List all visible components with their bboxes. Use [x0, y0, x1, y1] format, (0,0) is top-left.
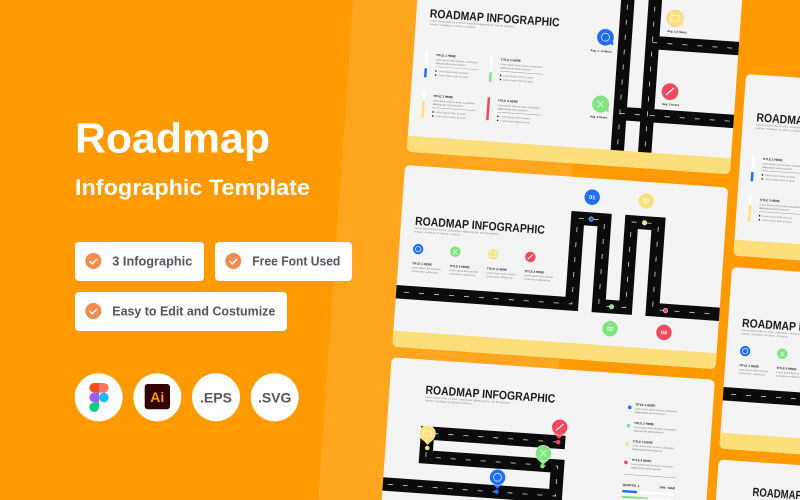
item 4: adipiscing elit, sed do eiusmod [497, 107, 528, 113]
main title: Roadmap [75, 114, 270, 162]
road stop 04: 04 [661, 330, 668, 337]
legend list [624, 402, 678, 472]
column 1: Lorem ipsum dolor sit amet [412, 266, 441, 271]
panel: slide 3, serpentine road with pins: tempor incididunt ut labore et dolore [425, 399, 472, 405]
slide 4 item 1: TITLE 1 HERE [762, 157, 783, 162]
legend list: TITLE 1 HERE [635, 402, 655, 408]
item 4 [486, 97, 541, 125]
road stop 02 [602, 304, 619, 337]
road stop 03: 03 [643, 199, 649, 205]
item 2: Lorem ipsum dolor sit amet, consectetur [500, 63, 543, 69]
slide 4 item 1 [751, 156, 800, 185]
road stop 01: 01 [589, 195, 595, 201]
item 3: Lorem ipsum dolor sit amet, consectetur [433, 99, 475, 105]
badge: yellow: Avg. 1,5 Hours [667, 29, 687, 34]
pin: blue [488, 469, 506, 494]
panel: slide 1, parallel roads: tempor incididunt ut labore et dolore [430, 23, 476, 29]
slide 5 column 1: Lorem ipsum dolor sit amet [739, 368, 768, 373]
legend list: Lorem ipsum dolor sit amet, consectetur [631, 463, 673, 469]
panel: slide 6, cropped corner [716, 460, 800, 500]
item 2: Lorem ipsum dolor sit amet [503, 75, 534, 80]
legend list: adipiscing elit, sed do eiusmod [632, 448, 663, 453]
slide 5 column 1 [738, 346, 770, 377]
feature pill: 3 Infographic: 3 Infographic [112, 254, 192, 268]
item 1: Lorem ipsum dolor sit amet [438, 70, 469, 75]
slide 4 item 3: Lorem ipsum dolor sit amet [762, 215, 792, 220]
icon: EPS format: .EPS [200, 390, 232, 406]
quarter progress bars: JAN - MAR [659, 485, 676, 490]
column 3 [486, 249, 518, 280]
legend list: Lorem ipsum dolor sit amet, consectetur [634, 426, 676, 432]
pin: yellow [418, 425, 436, 451]
badge: blue [590, 28, 614, 54]
item 3: Lorem ipsum dolor sit amet [435, 115, 466, 120]
panel: slide 3, serpentine road with pins: ROADMAP INFOGRAPHIC [425, 383, 556, 406]
column 4 [524, 251, 555, 283]
column 3: Lorem ipsum dolor sit amet [487, 271, 516, 277]
pin: red [551, 419, 568, 445]
panel: slide 1, parallel roads: ROADMAP INFOGRAPHIC [429, 6, 560, 30]
icon: SVG format [251, 373, 299, 421]
legend list: adipiscing elit, sed do eiusmod [631, 466, 662, 471]
slide 4 item 3: TITLE 3 HERE [760, 198, 780, 203]
slide 4 item 1: Lorem ipsum dolor sit amet [765, 174, 795, 179]
legend list: adipiscing elit, sed do eiusmod [633, 429, 664, 434]
item 3: TITLE 3 HERE [433, 94, 453, 99]
column 2 [448, 246, 480, 277]
column 3: consectetur adipiscing [486, 275, 513, 280]
column 1 [411, 244, 443, 275]
icon: Figma [75, 373, 123, 421]
column 4: Lorem ipsum dolor sit amet [524, 274, 553, 279]
slide 4 item 1: Lorem ipsum dolor sit amet [765, 178, 795, 183]
column 2: Lorem ipsum dolor sit amet [449, 269, 479, 274]
quarter progress bars [622, 474, 676, 500]
panel: slide 5, cropped right [719, 267, 800, 471]
icon: Adobe Illustrator [133, 373, 181, 421]
panel: slide 3, serpentine road with pins [382, 357, 715, 500]
icon: Adobe Illustrator: Ai [150, 389, 164, 405]
badge: green: Avg. 3 Hours [590, 114, 608, 120]
item 1: adipiscing elit, sed do eiusmod [435, 62, 466, 67]
badge: yellow [666, 9, 689, 34]
item 4: Lorem ipsum dolor sit amet [500, 119, 530, 125]
quarter progress bars: QUARTAL 1 [623, 483, 640, 488]
slide 5 column 1: consectetur adipiscing [739, 372, 765, 377]
feature pill: Easy to Edit and Costumize [75, 292, 287, 331]
legend list: TITLE 4 HERE [631, 458, 652, 463]
road stop 02: 02 [607, 326, 613, 333]
legend list: adipiscing elit, sed do eiusmod [635, 411, 665, 416]
panel: slide 2, winding road: Lorem ipsum dolor sit amet, consectetur adipiscing elit, sed do eiusmod [415, 227, 499, 236]
pin: green [534, 445, 552, 469]
feature pill: Free Font Used [215, 242, 352, 281]
column 4: TITLE 4 HERE [524, 269, 544, 274]
column 3: TITLE 2 HERE [487, 266, 507, 272]
item 4: Lorem ipsum dolor sit amet [500, 115, 531, 121]
badge: red [661, 83, 681, 107]
legend list: Lorem ipsum dolor sit amet, consectetur [635, 407, 677, 413]
panel: slide 3, serpentine road with pins: Lorem ipsum dolor sit amet, consectetur adipiscing elit, sed do eiusmod [425, 396, 510, 405]
slide 5 column 2 [775, 348, 800, 379]
badge: green [590, 95, 610, 120]
feature pill: 3 Infographic [75, 242, 204, 281]
panel: slide 2, winding road: ROADMAP INFOGRAPHIC [415, 214, 546, 237]
slide 5 column 2: TITLE 4 HERE [776, 366, 797, 371]
column 2: consectetur adipiscing [449, 272, 476, 277]
item 1: Lorem ipsum dolor sit amet [438, 74, 468, 79]
column 4: consectetur adipiscing [524, 278, 551, 282]
item 2: Lorem ipsum dolor sit amet [503, 78, 533, 84]
legend list: TITLE 3 HERE [633, 439, 653, 445]
column 2: TITLE 4 HERE [449, 264, 470, 269]
road stop 04 [656, 308, 673, 341]
panel: slide 1, parallel roads [407, 0, 743, 174]
column 1: TITLE 1 HERE [412, 261, 432, 267]
icon: SVG format: .SVG [258, 390, 292, 406]
badge: red: Avg. 2 Hours [662, 102, 680, 107]
item 1: Lorem ipsum dolor sit amet, consectetur [436, 58, 478, 64]
item 1 [424, 52, 479, 81]
subtitle: Infographic Template [75, 175, 310, 200]
icon: EPS format [192, 373, 240, 421]
item 1: TITLE 1 HERE [436, 53, 456, 58]
slide 5 column 1: TITLE 1 HERE [739, 363, 759, 369]
panel: slide 2, winding road [392, 165, 728, 369]
item 2: TITLE 2 HERE [501, 58, 521, 63]
road stop 01 [583, 189, 600, 222]
item 2: adipiscing elit, sed do eiusmod [500, 66, 531, 72]
item 3: Lorem ipsum dolor sit amet [435, 111, 466, 116]
item 2 [489, 56, 544, 85]
slide 4 item 3: adipiscing elit, sed do eiusmod [759, 207, 790, 212]
slide 4 item 3 [748, 197, 800, 225]
item 3: adipiscing elit, sed do eiusmod [432, 103, 463, 108]
item 3 [421, 93, 476, 121]
panel: slide 4, cropped right [733, 74, 800, 278]
panel: slide 5, cropped right: tempor incididunt ut labore et dolore [741, 332, 788, 339]
slide 4 item 3: Lorem ipsum dolor sit amet [762, 219, 792, 224]
feature pill: Easy to Edit and Costumize: Easy to Edit and Costumize [112, 304, 275, 318]
column 1: consectetur adipiscing [412, 270, 438, 275]
panel: slide 2, winding road: tempor incididunt ut labore et dolore [414, 230, 461, 237]
road stop 03 [637, 193, 654, 226]
badge: blue: Avg. 1 - 3 Hours [590, 48, 612, 54]
panel: slide 1, parallel roads: Lorem ipsum dolor sit amet, consectetur adipiscing elit, sed do eiusmod [430, 19, 514, 28]
legend list: Lorem ipsum dolor sit amet, consectetur [632, 444, 675, 450]
feature pill: Free Font Used: Free Font Used [252, 254, 340, 268]
slide 4 item 1: adipiscing elit, sed do eiusmod [762, 166, 793, 171]
item 4: Lorem ipsum dolor sit amet, consectetur [498, 104, 540, 110]
item 4: TITLE 4 HERE [498, 98, 518, 104]
legend list: TITLE 2 HERE [634, 421, 654, 426]
